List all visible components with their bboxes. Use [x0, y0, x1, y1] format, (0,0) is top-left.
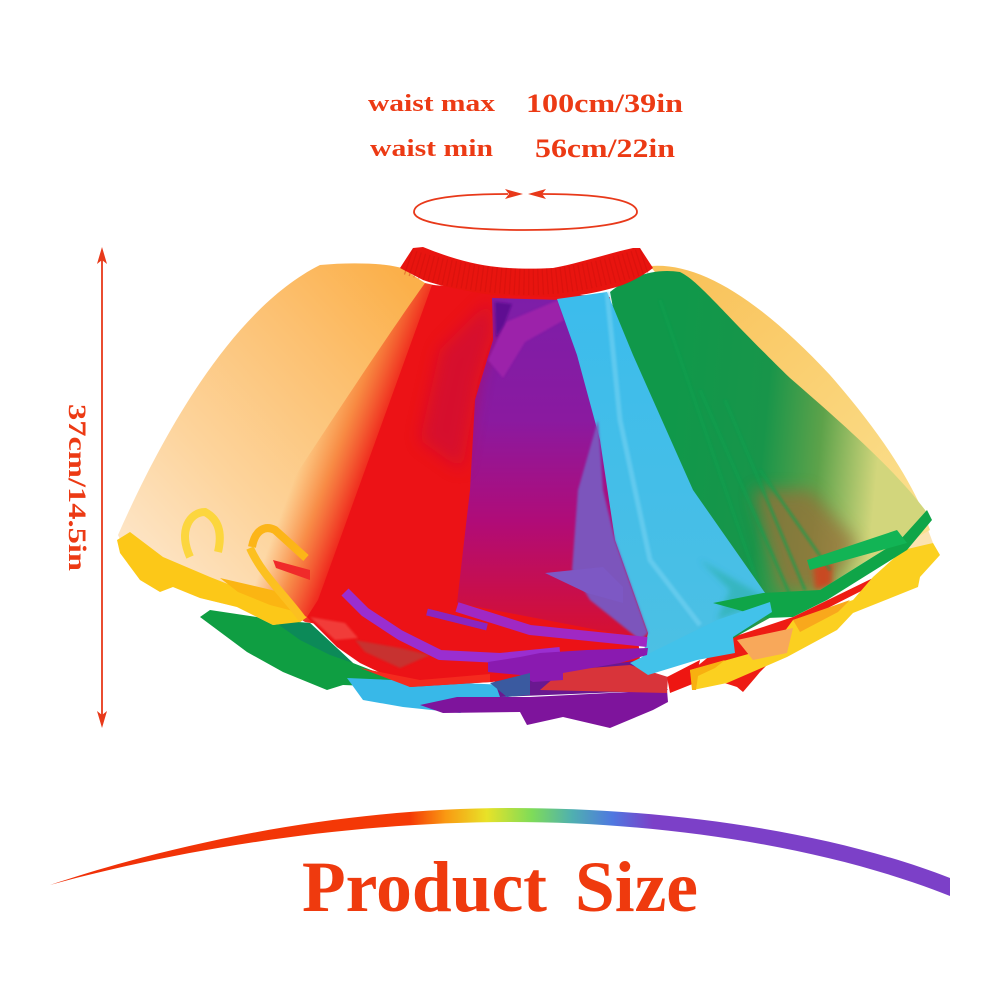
green tulle brown shading — [660, 300, 858, 595]
height arrow — [97, 247, 107, 728]
purple tail ribbon — [545, 567, 623, 603]
purple tulle — [457, 298, 650, 640]
waistband elastic ribs — [408, 260, 646, 282]
purple scarf highlight — [488, 300, 564, 378]
waist min value: 56cm/22in — [535, 134, 676, 163]
orange to red tulle — [230, 283, 500, 650]
blue sheen — [607, 292, 770, 625]
height label: 37cm/14.5in — [63, 404, 90, 571]
waist max value: 100cm/39in — [526, 89, 684, 118]
blue purple shade — [572, 420, 648, 640]
tutu skirt — [117, 247, 940, 728]
purple scarf hollow — [495, 302, 512, 338]
hem sheen — [310, 617, 490, 687]
waist max label: waist max — [368, 90, 496, 117]
waist circumference arrow — [414, 189, 637, 230]
orange tulle left — [118, 263, 440, 625]
back hem layers — [200, 527, 940, 728]
green tulle — [610, 271, 928, 640]
title: Product — [302, 847, 547, 927]
rainbow arc — [50, 808, 950, 896]
front ribbons — [345, 510, 932, 697]
title — [302, 847, 698, 927]
left yellow ribbons — [117, 512, 310, 625]
yellow tulle right — [650, 266, 930, 560]
waist min label: waist min — [370, 135, 493, 162]
blue tulle — [557, 292, 770, 668]
title: Size — [575, 847, 698, 927]
red tulle centre — [307, 285, 640, 687]
waistband — [400, 247, 653, 297]
crimson pleat — [420, 300, 494, 470]
